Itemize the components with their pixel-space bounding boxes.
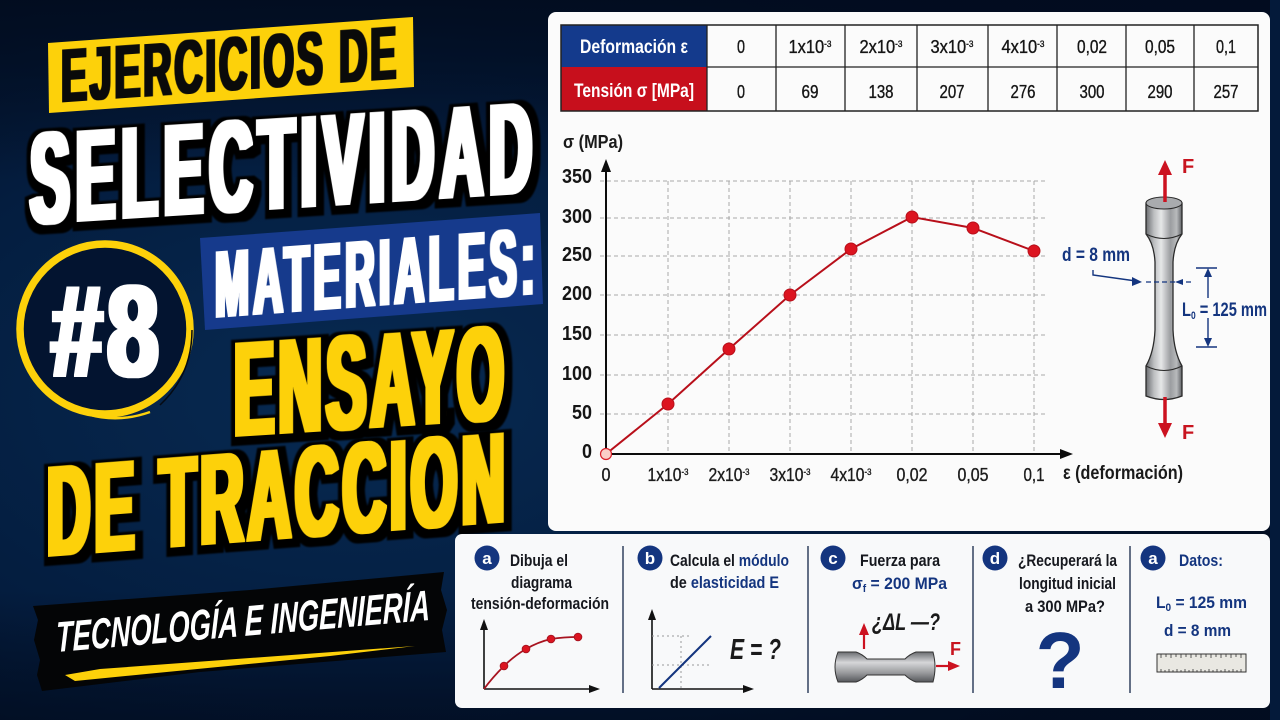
data box	[1140, 546, 1247, 672]
data box: d = 8 mm	[1164, 621, 1231, 640]
data box: 0	[1166, 602, 1171, 614]
data table: 3x10	[930, 37, 970, 57]
line chart: -3	[865, 467, 872, 477]
line chart: 1x10	[648, 465, 687, 485]
question d: ¿Recuperará la	[1018, 551, 1117, 570]
arrow: force down	[1158, 397, 1172, 438]
data box: a	[1148, 549, 1158, 568]
panel: data table and chart	[548, 12, 1270, 531]
question a: diagrama	[511, 573, 572, 592]
data table: 0,05	[1145, 37, 1175, 57]
data table: 138	[868, 82, 894, 102]
banner: materiales	[200, 208, 543, 337]
question c: σ	[852, 574, 864, 593]
question c: = 200 MPa	[866, 574, 947, 593]
question b: de elasticidad E	[670, 573, 779, 592]
question d	[982, 546, 1117, 705]
data table: -3	[1037, 39, 1044, 49]
data table: 4x10	[1002, 37, 1041, 57]
question c: f	[863, 583, 866, 595]
line chart: -3	[743, 467, 750, 477]
data table: 300	[1080, 82, 1104, 102]
data table: Tensión σ [MPa]	[574, 81, 694, 102]
specimen diagram	[1062, 156, 1267, 444]
line chart: 0	[602, 465, 610, 485]
line chart: 350	[562, 166, 592, 188]
data box: L	[1156, 593, 1166, 612]
data box: = 125 mm	[1171, 593, 1247, 612]
line chart: 0,02	[896, 465, 928, 485]
question a	[471, 546, 609, 693]
line chart: 300	[562, 206, 592, 228]
badge: number 8	[20, 244, 192, 418]
data table: 0	[737, 37, 745, 57]
question d: a 300 MPa?	[1025, 597, 1105, 616]
data table: -3	[895, 39, 902, 49]
question b: E = ?	[730, 634, 781, 666]
question c: Fuerza para	[860, 551, 940, 570]
question c	[820, 546, 961, 682]
banner: tecnologia e ingenieria: TECNOLOGÍA E INGENIERÍA	[56, 582, 430, 662]
line chart: -3	[804, 467, 810, 477]
question a: a	[482, 549, 492, 568]
data table: -3	[966, 39, 974, 49]
specimen diagram: 0	[1191, 310, 1196, 322]
question b: b	[645, 549, 655, 568]
question c: ¿ΔL —?	[872, 609, 940, 636]
data table: 0	[737, 82, 745, 102]
data table: 1x10	[788, 37, 828, 57]
data table: 2x10	[860, 37, 899, 57]
data box: Datos:	[1179, 551, 1223, 570]
specimen diagram: F	[1182, 422, 1194, 444]
specimen diagram: L	[1182, 300, 1194, 321]
question a: Dibuja el	[510, 551, 568, 570]
data table: -3	[824, 39, 832, 49]
data table: Deformación ε	[580, 37, 688, 58]
line chart: 200	[562, 283, 592, 305]
question a: tensión-deformación	[471, 594, 609, 613]
data table: 290	[1148, 82, 1172, 102]
question c: F	[950, 639, 961, 659]
question b: Calcula el módulo	[670, 551, 789, 570]
badge: number 8: #8	[51, 258, 163, 404]
banner: tecnologia e ingenieria	[33, 572, 447, 691]
line chart: 2x10	[708, 465, 748, 485]
icon: ruler	[1157, 654, 1246, 672]
data table: 207	[940, 82, 964, 102]
data table	[561, 25, 1258, 111]
data table: 276	[1010, 82, 1036, 102]
text: DE TRACCIÓN	[47, 406, 509, 584]
line chart: 250	[562, 244, 592, 266]
question b	[638, 546, 789, 693]
data table: 69	[802, 82, 818, 102]
line chart: 100	[562, 363, 592, 385]
question d: ?	[1036, 616, 1084, 705]
badge: ejercicios de	[48, 10, 414, 118]
line chart	[562, 132, 1183, 485]
line chart: 0,1	[1024, 465, 1044, 485]
line chart: 4x10	[830, 465, 870, 485]
line chart: 3x10	[770, 465, 809, 485]
text: SELECTIVIDAD	[30, 74, 538, 252]
line chart: ε (deformación)	[1063, 463, 1183, 484]
text: MATERIALES:	[215, 208, 539, 337]
specimen diagram: d = 8 mm	[1062, 245, 1130, 266]
specimen diagram: F	[1182, 156, 1194, 178]
line chart: 0	[582, 441, 592, 463]
arrow: force up	[1158, 160, 1172, 202]
panel: questions	[455, 534, 1270, 708]
question c: c	[828, 549, 838, 568]
line chart: 50	[572, 402, 592, 424]
text: ENSAYO	[234, 299, 508, 465]
line chart: σ (MPa)	[563, 132, 623, 152]
question d: d	[990, 549, 1000, 568]
data table: 257	[1214, 82, 1238, 102]
line chart: 150	[562, 323, 592, 345]
line chart: 0,05	[958, 465, 988, 485]
data table: 0,1	[1216, 37, 1236, 57]
data table: 0,02	[1077, 37, 1107, 57]
line chart: -3	[682, 467, 688, 477]
question d: longitud inicial	[1019, 574, 1116, 593]
